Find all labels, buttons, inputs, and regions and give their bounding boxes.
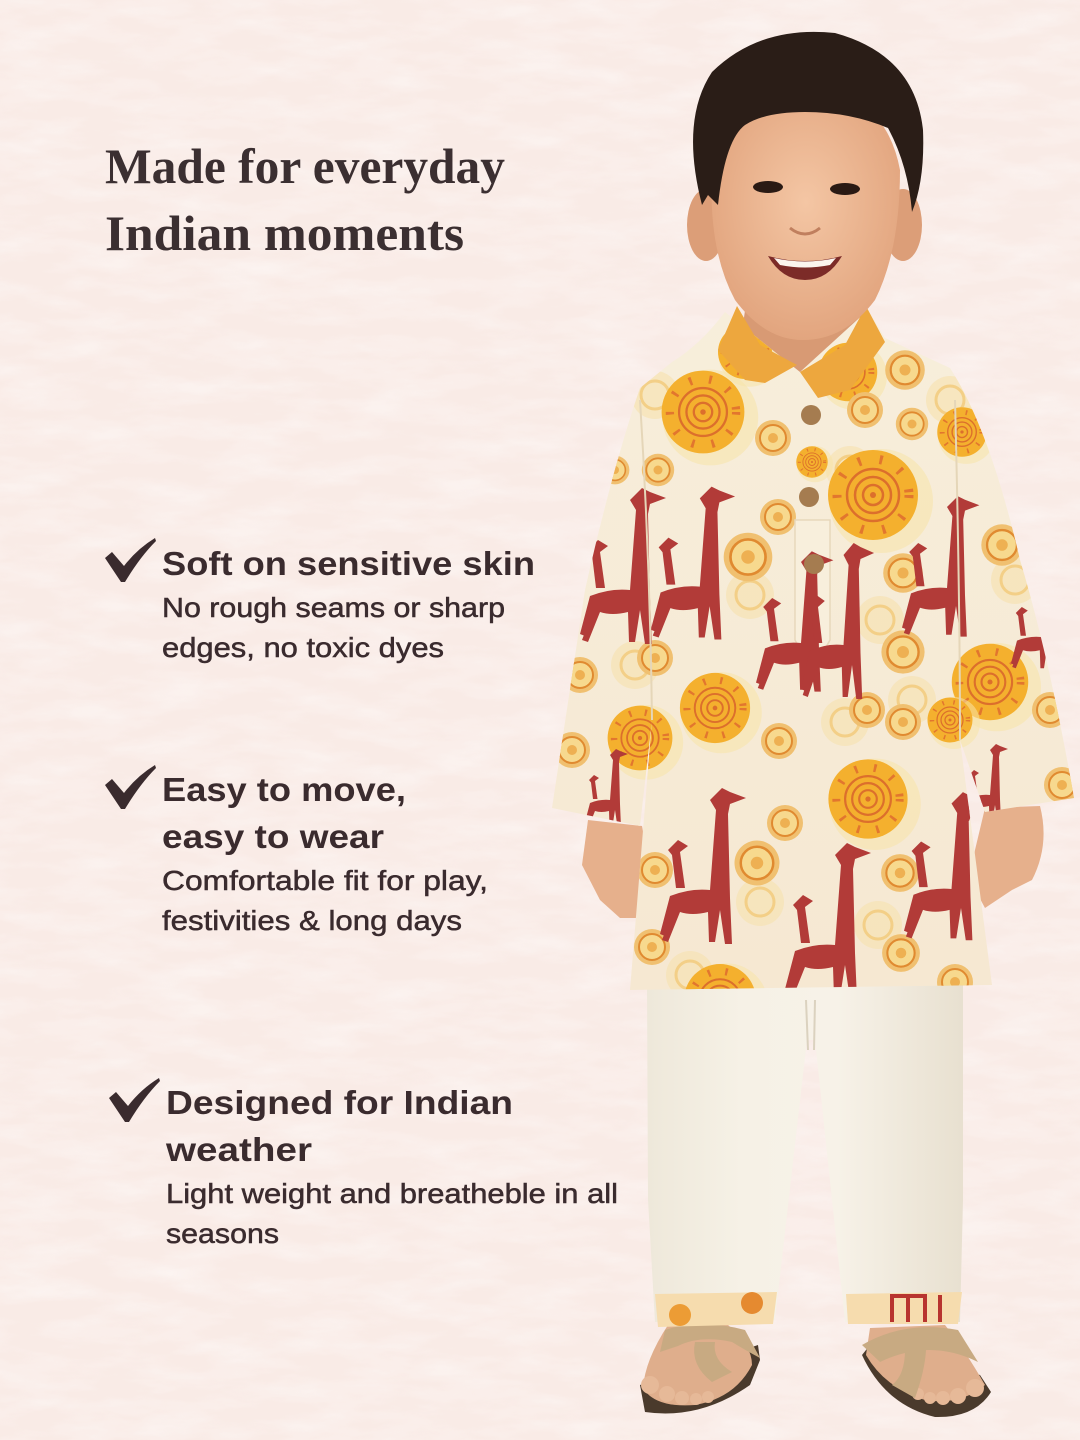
- title: Indian moments: [105, 205, 464, 261]
- sleeve folds: [640, 400, 960, 740]
- description: edges, no toxic dyes: [162, 632, 444, 663]
- hair: [693, 32, 923, 212]
- description: [162, 865, 488, 936]
- print: large sun motifs: [608, 324, 1041, 1046]
- boy photo illustration: [552, 32, 1080, 1417]
- print: small round motifs: [554, 350, 1080, 1000]
- heading: Soft on sensitive skin: [162, 545, 535, 582]
- neck: [740, 290, 868, 385]
- nose: [790, 228, 820, 234]
- icon: check mark: [105, 765, 156, 809]
- description: festivities & long days: [162, 905, 462, 936]
- heading: [165, 1084, 513, 1168]
- eyes: [753, 181, 860, 195]
- description: Light weight and breatheble in all: [166, 1178, 618, 1209]
- description: [162, 592, 505, 663]
- heading: easy to wear: [162, 818, 384, 855]
- heading: Designed for Indian: [166, 1084, 513, 1121]
- icon: check mark: [109, 1078, 160, 1122]
- feet and sandals: [640, 1324, 991, 1417]
- print: giraffes: [580, 487, 1063, 999]
- benefit: designed for Indian weather: [109, 1078, 618, 1249]
- collar: [718, 306, 797, 383]
- pants: [647, 985, 963, 1327]
- description: No rough seams or sharp: [162, 592, 505, 623]
- title: [105, 138, 505, 261]
- benefit: easy to move: [105, 765, 488, 936]
- description: [166, 1178, 618, 1249]
- title: Made for everyday: [105, 138, 505, 194]
- heading: Easy to move,: [162, 771, 406, 808]
- benefit: soft on sensitive skin: [105, 538, 535, 663]
- smile: [768, 256, 842, 280]
- buttons: [799, 405, 824, 574]
- kurta with print: [552, 306, 1080, 1046]
- heading: [162, 771, 406, 855]
- print: faint background circles: [611, 371, 1039, 999]
- head: [687, 32, 923, 340]
- description: seasons: [166, 1218, 279, 1249]
- heading: weather: [165, 1131, 312, 1168]
- description: Comfortable fit for play,: [162, 865, 488, 896]
- hands: [582, 806, 1044, 918]
- print: placket: [794, 519, 831, 646]
- icon: check mark: [105, 538, 156, 582]
